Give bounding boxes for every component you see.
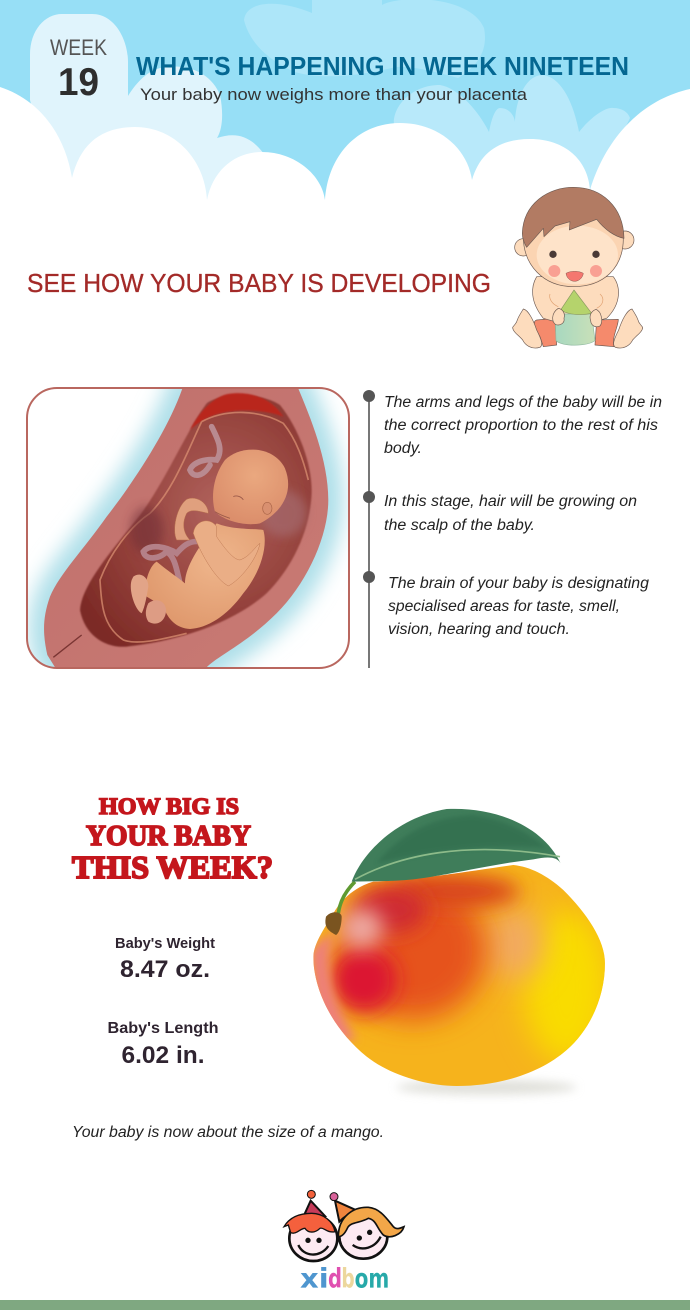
- fact: brain: specialised areas for taste, smell,: [388, 598, 620, 615]
- section heading: SEE HOW YOUR BABY IS DEVELOPING: [27, 268, 491, 298]
- girl hair: [338, 1207, 404, 1237]
- fetus near arm: [193, 521, 260, 586]
- week number: 19: [58, 61, 99, 104]
- wall crack: [53, 635, 82, 657]
- timeline dots: [363, 390, 375, 583]
- blue glow around womb: [44, 389, 328, 667]
- leaf dark shading: [377, 815, 547, 863]
- weight value: 8.47 oz.: [120, 956, 210, 983]
- baby face: [523, 188, 623, 287]
- fact: arms and legs: The arms and legs of the baby will be in: [384, 394, 662, 411]
- umbilical cord lower: [143, 541, 200, 583]
- orange-red blush: [340, 880, 487, 1020]
- wordmark letters: Ki: xi: [300, 1263, 329, 1294]
- length value: 6.02 in.: [122, 1042, 204, 1069]
- weight label: Baby's Weight: [115, 936, 215, 952]
- fetus foot lower: [146, 600, 166, 624]
- girl party hat: [335, 1201, 357, 1222]
- baby feet: [513, 309, 643, 348]
- girl hat pompom: [330, 1193, 338, 1201]
- fetus body: [146, 523, 265, 629]
- left lobe: [310, 936, 357, 1040]
- fact: brain: The brain of your baby is designating: [388, 575, 649, 592]
- fetus head: [213, 450, 288, 524]
- top red blush: [393, 875, 520, 908]
- fact: hair: the scalp of the baby.: [384, 517, 535, 534]
- heading line 1: HOW BIG IS: [99, 794, 239, 819]
- heading line 3: THIS WEEK?: [72, 849, 273, 885]
- background cloud: left, behind week badge: [30, 14, 264, 210]
- yellow side: [523, 910, 610, 1063]
- header sky background: [0, 0, 690, 215]
- footer bar: [0, 1300, 690, 1310]
- fetus foot upper: [131, 575, 148, 613]
- dark cavity shade: [130, 507, 163, 553]
- length label: Baby's Length: [108, 1020, 218, 1037]
- baby torso: [533, 277, 618, 322]
- girl face: [339, 1215, 387, 1259]
- panel background: [27, 388, 349, 668]
- week label: WEEK: [50, 35, 107, 60]
- womb wall: [44, 389, 328, 667]
- boy party hat: [301, 1201, 325, 1223]
- baby legs: [534, 318, 618, 347]
- white foreground clouds: [0, 87, 690, 240]
- fact: arms and legs: the correct proportion to the rest of his: [384, 417, 658, 434]
- stat: weight: [115, 936, 215, 983]
- size heading: [72, 794, 273, 885]
- womb cavity: [80, 395, 312, 647]
- placenta: [190, 393, 283, 430]
- logo: Kidbom: [284, 1190, 404, 1294]
- baby cheeks: [548, 265, 602, 277]
- stem node: [325, 912, 342, 935]
- fetus ear: [263, 502, 272, 514]
- subtitle: Your baby now weighs more than your placenta: [140, 85, 528, 104]
- mango photo illustration: [300, 809, 620, 1100]
- background cloud: right: [394, 75, 630, 200]
- heading line 2: YOUR BABY: [86, 821, 251, 852]
- timeline of developments: [363, 390, 662, 668]
- boy eyes: [305, 1238, 322, 1243]
- highlight: [340, 908, 383, 948]
- stem: [338, 882, 355, 913]
- baby mouth: [566, 271, 583, 281]
- wordmark: [300, 1263, 389, 1294]
- mango fruit: [313, 865, 605, 1086]
- boy hat pompom: [307, 1190, 315, 1198]
- amniotic haze: [260, 490, 307, 537]
- timeline line: [368, 396, 370, 668]
- fact: hair: In this stage, hair will be growing on: [384, 493, 637, 510]
- boy hair: [284, 1213, 335, 1233]
- week badge: [50, 35, 107, 104]
- leaf midrib: [355, 850, 560, 879]
- fact: arms and legs: body.: [384, 440, 422, 457]
- baby eyes: [549, 251, 600, 258]
- boy face: [289, 1216, 337, 1261]
- leaf: [352, 809, 561, 882]
- fact: brain: vision, hearing and touch.: [388, 621, 570, 638]
- membrane line: [100, 412, 308, 642]
- footnote: Your baby is now about the size of a mango.: [72, 1124, 384, 1141]
- toy block: [555, 314, 595, 345]
- boy smile: [298, 1245, 328, 1255]
- fetus facial features: [215, 496, 243, 518]
- baby face highlight: [537, 226, 618, 284]
- mango shadow: [397, 1080, 577, 1095]
- umbilical cord: [190, 427, 220, 475]
- red blush: [330, 947, 397, 1013]
- stat: length: [108, 1020, 218, 1069]
- icon: cartoon baby with toy: [513, 187, 643, 348]
- panel border: [27, 388, 349, 668]
- baby hands: [553, 308, 602, 327]
- panel: fetus in womb illustration: [27, 388, 349, 668]
- fruit base colour: [313, 865, 605, 1086]
- wordmark letter: d: d: [328, 1263, 342, 1294]
- fetus far arm and hand: [175, 498, 208, 540]
- baby arm creases: [550, 294, 603, 308]
- girl smile: [353, 1237, 381, 1248]
- baby hair: [522, 187, 624, 247]
- baby ears: [515, 239, 532, 256]
- wordmark letters: om: om: [355, 1263, 389, 1294]
- toy roof: [561, 290, 592, 315]
- dark pink side: [353, 887, 427, 933]
- background cloud: top centre: [244, 0, 485, 78]
- girl eyes: [357, 1230, 372, 1241]
- title: WHAT'S HAPPENING IN WEEK NINETEEN: [136, 51, 629, 81]
- wordmark letter: b: b: [341, 1263, 355, 1294]
- peach blush: [483, 907, 543, 980]
